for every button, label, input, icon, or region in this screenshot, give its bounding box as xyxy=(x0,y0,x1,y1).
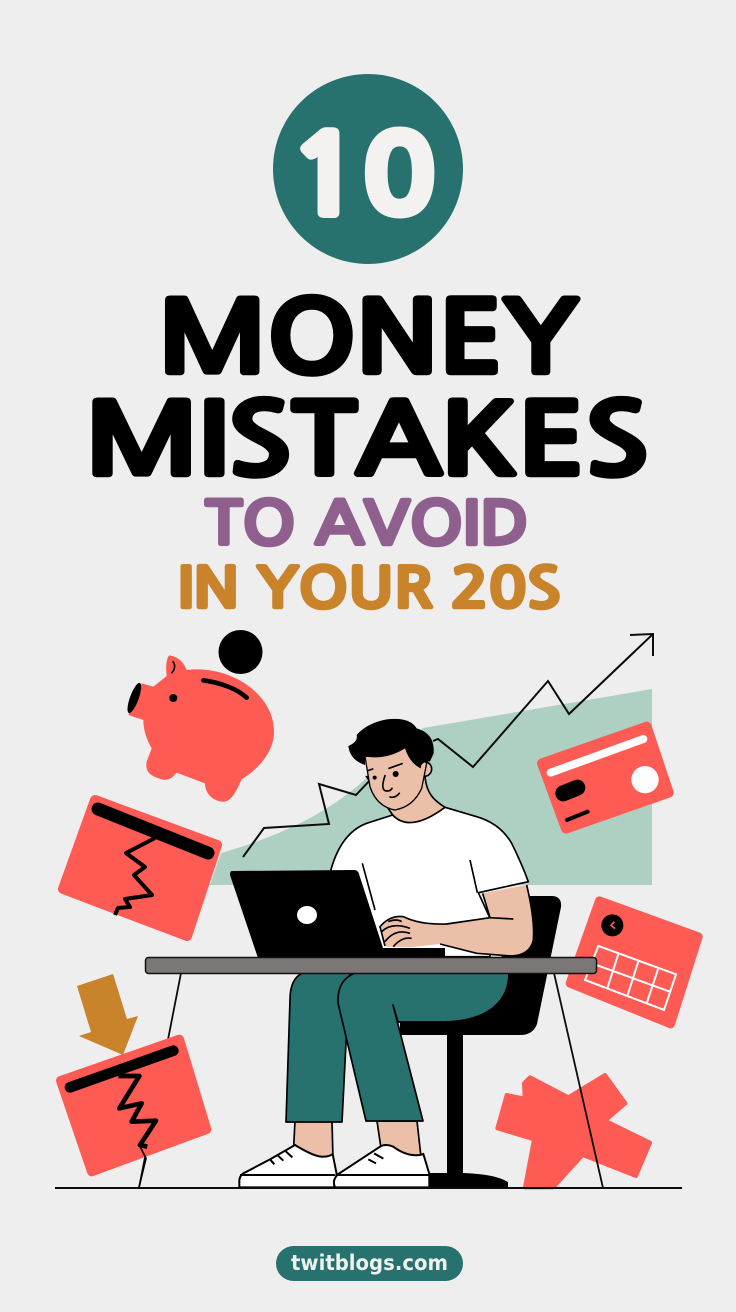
person: upper body xyxy=(330,719,528,957)
head xyxy=(365,743,427,810)
chair xyxy=(400,896,561,1188)
icon: broken card upper xyxy=(63,800,217,936)
ground line xyxy=(55,1187,682,1189)
icon: gold down arrow xyxy=(77,974,138,1055)
icon: calendar xyxy=(570,901,698,1024)
title: money mistakes xyxy=(85,290,649,490)
title: money mistakes: MISTAKES xyxy=(85,392,649,490)
t-shirt xyxy=(330,807,528,957)
badge: number 10 xyxy=(273,74,463,264)
icon: credit card xyxy=(542,727,669,829)
person: shoes xyxy=(239,1145,429,1187)
laptop xyxy=(230,870,445,958)
subtitle: in your 20s: IN YOUR 20S xyxy=(178,562,561,616)
person: calves xyxy=(293,1121,421,1160)
footer: website pill xyxy=(276,1246,463,1281)
icon: broken card lower xyxy=(61,1039,207,1187)
chart: mint growth area xyxy=(210,689,652,885)
hair xyxy=(348,719,434,768)
footer: website pill: twitblogs.com xyxy=(291,1251,448,1275)
badge: number 10: 10 xyxy=(289,122,436,230)
ear xyxy=(417,762,432,776)
neck xyxy=(367,777,445,825)
face features xyxy=(368,764,402,797)
icon: piggy bank xyxy=(125,655,274,802)
icon: red cross mark xyxy=(497,1075,650,1187)
chart: rising trend line with arrow xyxy=(243,634,653,857)
person: trousers xyxy=(286,973,509,1122)
subtitle: to avoid: TO AVOID xyxy=(205,494,529,554)
person: arm and hand xyxy=(363,885,534,957)
title: money mistakes: MONEY xyxy=(158,290,579,388)
desk legs xyxy=(139,973,603,1188)
desk top xyxy=(146,958,596,974)
icon: coin xyxy=(218,630,262,674)
